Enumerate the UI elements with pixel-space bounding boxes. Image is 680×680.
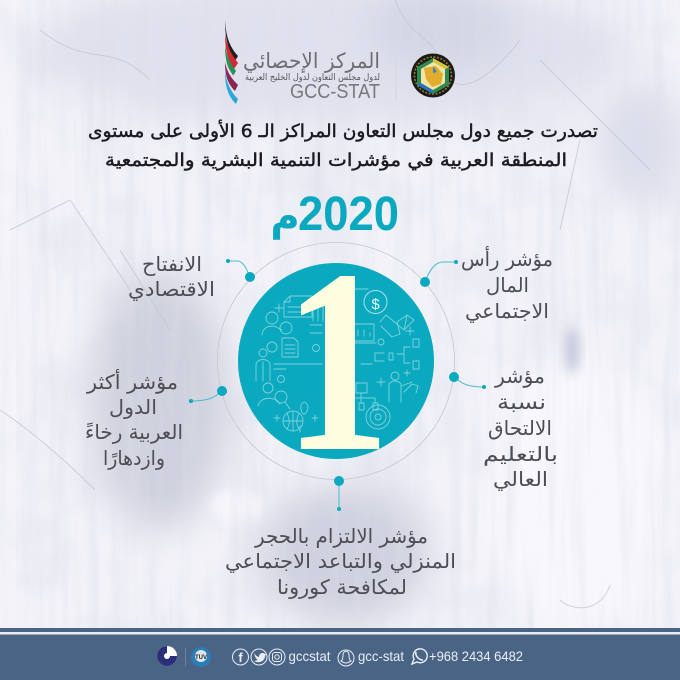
icon: facebook: f [238,650,243,665]
label: higher education: بالتعليم [483,442,558,466]
title line 1: تصدرت جميع دول مجلس التعاون المراكز الـ 6 الأولى على مستوى [88,120,598,142]
main teal circle [238,263,434,459]
footer logo: TUV [191,647,211,667]
logo: GCC-STAT [225,20,396,104]
label: higher education: نسبة [497,390,546,414]
year heading: م [270,194,300,240]
emblem: GCC seal [411,54,455,98]
icon: facebook [232,649,248,665]
logo latin name: GCC-STAT [290,81,380,103]
icon: whatsapp [412,649,427,664]
label: economic openness [128,252,215,302]
handle: gcc-stat: gcc-stat [358,648,404,664]
label: higher education [483,364,558,492]
icon: instagram [269,649,285,665]
handle: gccstat: gccstat [288,648,331,664]
line icons inside circle [256,289,419,432]
icon: person with badge [262,312,292,335]
connector: prosperity [189,386,227,403]
label: home quarantine: مؤشر الالتزام بالحجر [254,524,428,548]
label: higher education: الالتحاق [488,416,552,440]
label: prosperity [85,369,183,470]
label: social capital [461,246,553,324]
label: social capital: الاجتماعي [465,299,549,324]
icon: twitter [251,649,267,665]
footer logo: TUV: TUV [195,655,207,661]
title [88,120,598,171]
label: social capital: المال [486,273,529,297]
connector: home quarantine [334,476,344,511]
label: economic openness: الانفتاح [142,252,202,276]
icon: org chart [349,383,378,410]
phone number: +968 2434 6482 [429,648,523,664]
label: higher education: العالي [493,467,548,492]
label: prosperity: العربية رخاءً [85,420,183,444]
footer logo: left [157,646,177,666]
icon: sparkle decorations [274,289,414,432]
label: prosperity: مؤشر أكثر [86,369,178,394]
logo subtitle arabic: لدول مجلس التعاون لدول الخليج العربية [245,73,380,83]
icon: presentation laptop [351,324,376,343]
label: prosperity: وازدهارًا [103,446,165,470]
icon: person top left [313,296,323,321]
year heading: 2020 [298,188,399,241]
connector: economic openness [226,259,255,282]
outer ring [218,242,454,480]
connectors and nodes [189,259,486,511]
label: higher education: مؤشر [494,364,545,388]
connector: higher education [449,372,486,389]
label: home quarantine: لمكافحة كورونا [277,575,407,599]
icon: snapchat [338,650,354,666]
icon: dollar circle [364,290,387,314]
footer band [0,628,680,680]
icon: paper report [282,338,298,357]
label: home quarantine [225,524,456,599]
icon: ribbon stripes [225,20,238,104]
icon: globe and pin [283,402,308,431]
icon: handshake [380,315,414,337]
icon: speech and figure [256,342,277,381]
icon: dollar circle: $ [371,296,380,313]
icon: dashes left [274,325,322,369]
label: social capital: مؤشر رأس [461,246,553,271]
label: prosperity: الدول [109,395,157,419]
label: home quarantine: المنزلي والتباعد الاجتماعي [225,549,456,574]
label: economic openness: الاقتصادي [128,277,215,302]
icon: presenter with chart [389,372,418,402]
icon: document and pen [284,296,312,317]
icon: gear [366,405,390,429]
title line 2: المنطقة العربية في مؤشرات التنمية البشرية والمجتمعية [105,150,567,171]
connector: social capital [420,260,458,287]
icon: magnifier person [258,383,290,409]
big number 1: 1 [284,216,390,506]
icon: org chart vertical [375,339,419,369]
logo name arabic: المركز الإحصائي [243,49,380,73]
